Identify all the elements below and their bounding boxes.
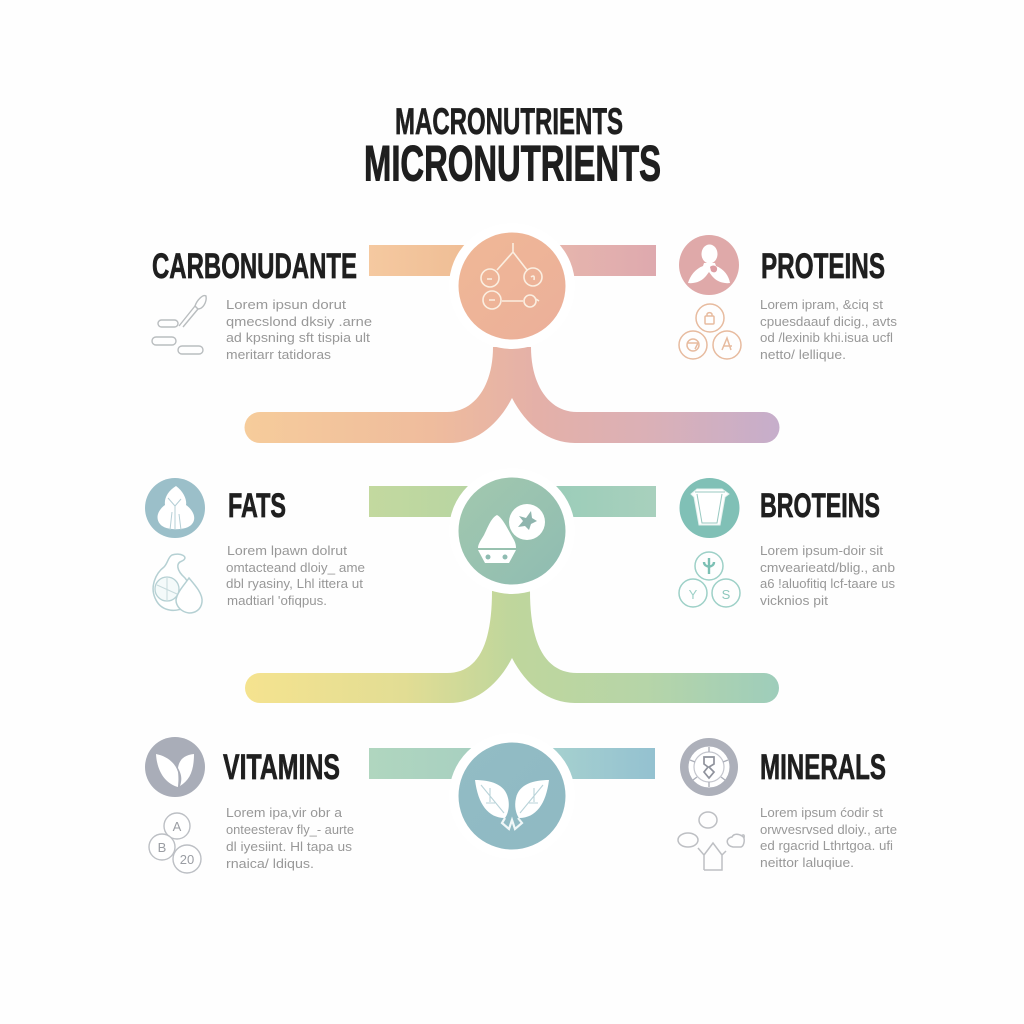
text block xyxy=(760,298,897,362)
text block: a6 !aluofitiq lcf-taare us xyxy=(760,577,895,591)
title line: micronutrients: MICRONUTRIENTS xyxy=(364,136,661,192)
bar: row 2 left xyxy=(369,486,479,517)
panel: carbonudante xyxy=(152,247,372,362)
text block xyxy=(760,544,895,608)
text block: ed rgacrid Lthrtgoa. ufi xyxy=(760,839,893,853)
icon: three circles: S xyxy=(722,587,731,602)
icon: lettered circles xyxy=(149,813,201,873)
bar: row 1 right xyxy=(545,245,656,276)
icon: three circles xyxy=(679,304,741,359)
panel: broteins xyxy=(679,478,895,608)
icon circle: mineral ring xyxy=(680,738,738,796)
icon: stones and shape xyxy=(678,812,744,870)
heading: VITAMINS xyxy=(223,748,340,787)
panel: vitamins xyxy=(145,737,354,873)
hub circle: vitamins and minerals xyxy=(449,733,575,859)
title xyxy=(364,101,661,192)
text block: madtiarl 'ofiqpus. xyxy=(227,594,327,608)
icon: lettered circles: 20 xyxy=(180,852,194,867)
panel: minerals xyxy=(678,738,897,870)
branching connector 2 xyxy=(245,591,779,703)
text block: Lorem ipsum ćodir st xyxy=(760,806,884,820)
text block: onteesterav fly_- aurte xyxy=(226,823,354,837)
icon: bottle and drop xyxy=(153,554,202,613)
text block: dl iyesiint. Hl tapa us xyxy=(226,840,352,854)
text block: dbl ryasiny, Lhl ittera ut xyxy=(226,577,364,591)
icon circle: cup xyxy=(680,478,740,538)
icon circle: figure xyxy=(679,235,739,295)
icon: lettered circles: B xyxy=(158,840,166,855)
text block xyxy=(760,806,897,870)
bar: row 3 left xyxy=(369,748,479,779)
hub circle: carbohydrates xyxy=(449,223,575,349)
text block: vicknios pit xyxy=(760,594,829,608)
text block: orwvesrvsed dloiy., arte xyxy=(760,823,897,837)
heading: PROTEINS xyxy=(761,247,885,286)
text block: meritarr tatidoras xyxy=(226,348,331,362)
icon: two leaves xyxy=(475,780,549,829)
icon: molecule xyxy=(481,243,542,309)
text block: rnaica/ ldiqus. xyxy=(226,857,314,871)
text block: Lorem ipsun dorut xyxy=(226,298,347,312)
text block: omtacteand dloiy_ ame xyxy=(226,561,365,575)
connector row 3 xyxy=(369,748,655,779)
icon: lettered circles: A xyxy=(173,819,182,834)
panel: proteins xyxy=(679,235,897,362)
icon: three circles xyxy=(679,552,740,607)
heading: BROTEINS xyxy=(760,487,880,525)
heading: CARBONUDANTE xyxy=(152,247,357,286)
text block: od /lexinib khi.isua ucfl xyxy=(760,331,893,345)
bar: row 3 right xyxy=(545,748,655,779)
text block: ad kpsning sft tispia ult xyxy=(226,331,371,345)
connector row 1 xyxy=(244,245,779,443)
text block: Lorem lpawn dolrut xyxy=(227,544,348,558)
panel: fats xyxy=(145,478,365,613)
icon circle: droplets xyxy=(145,478,205,538)
text block: netto/ lellique. xyxy=(760,348,846,362)
text block: Lorem ipa,vir obr a xyxy=(226,806,342,820)
text block: neittor laluqiue. xyxy=(760,856,854,870)
text block: cmvearieatd/blig., anb xyxy=(760,561,895,575)
icon: cone and leaf xyxy=(478,504,545,563)
text block xyxy=(226,806,354,871)
bar: row 1 left xyxy=(369,245,479,276)
text block: Lorem ipsum-doir sit xyxy=(760,544,884,558)
icon circle: leaves xyxy=(145,737,205,797)
heading: FATS xyxy=(228,487,286,525)
text block xyxy=(226,544,365,608)
icon: three circles: Y xyxy=(689,587,698,602)
title line: macronutrients: MACRONUTRIENTS xyxy=(395,101,623,142)
icon: utensil and pills xyxy=(152,296,206,354)
hub circle: fats and proteins xyxy=(449,468,575,594)
branching connector 1 xyxy=(244,347,779,443)
text block: Lorem ipram, &ciq st xyxy=(760,298,884,312)
heading: MINERALS xyxy=(760,748,886,787)
text block: qmecslond dksiy .arne xyxy=(226,315,372,329)
text block: cpuesdaauf dicig., avts xyxy=(760,315,897,329)
connector row 2 xyxy=(245,486,779,703)
text block xyxy=(226,298,372,362)
bar: row 2 right xyxy=(545,486,656,517)
